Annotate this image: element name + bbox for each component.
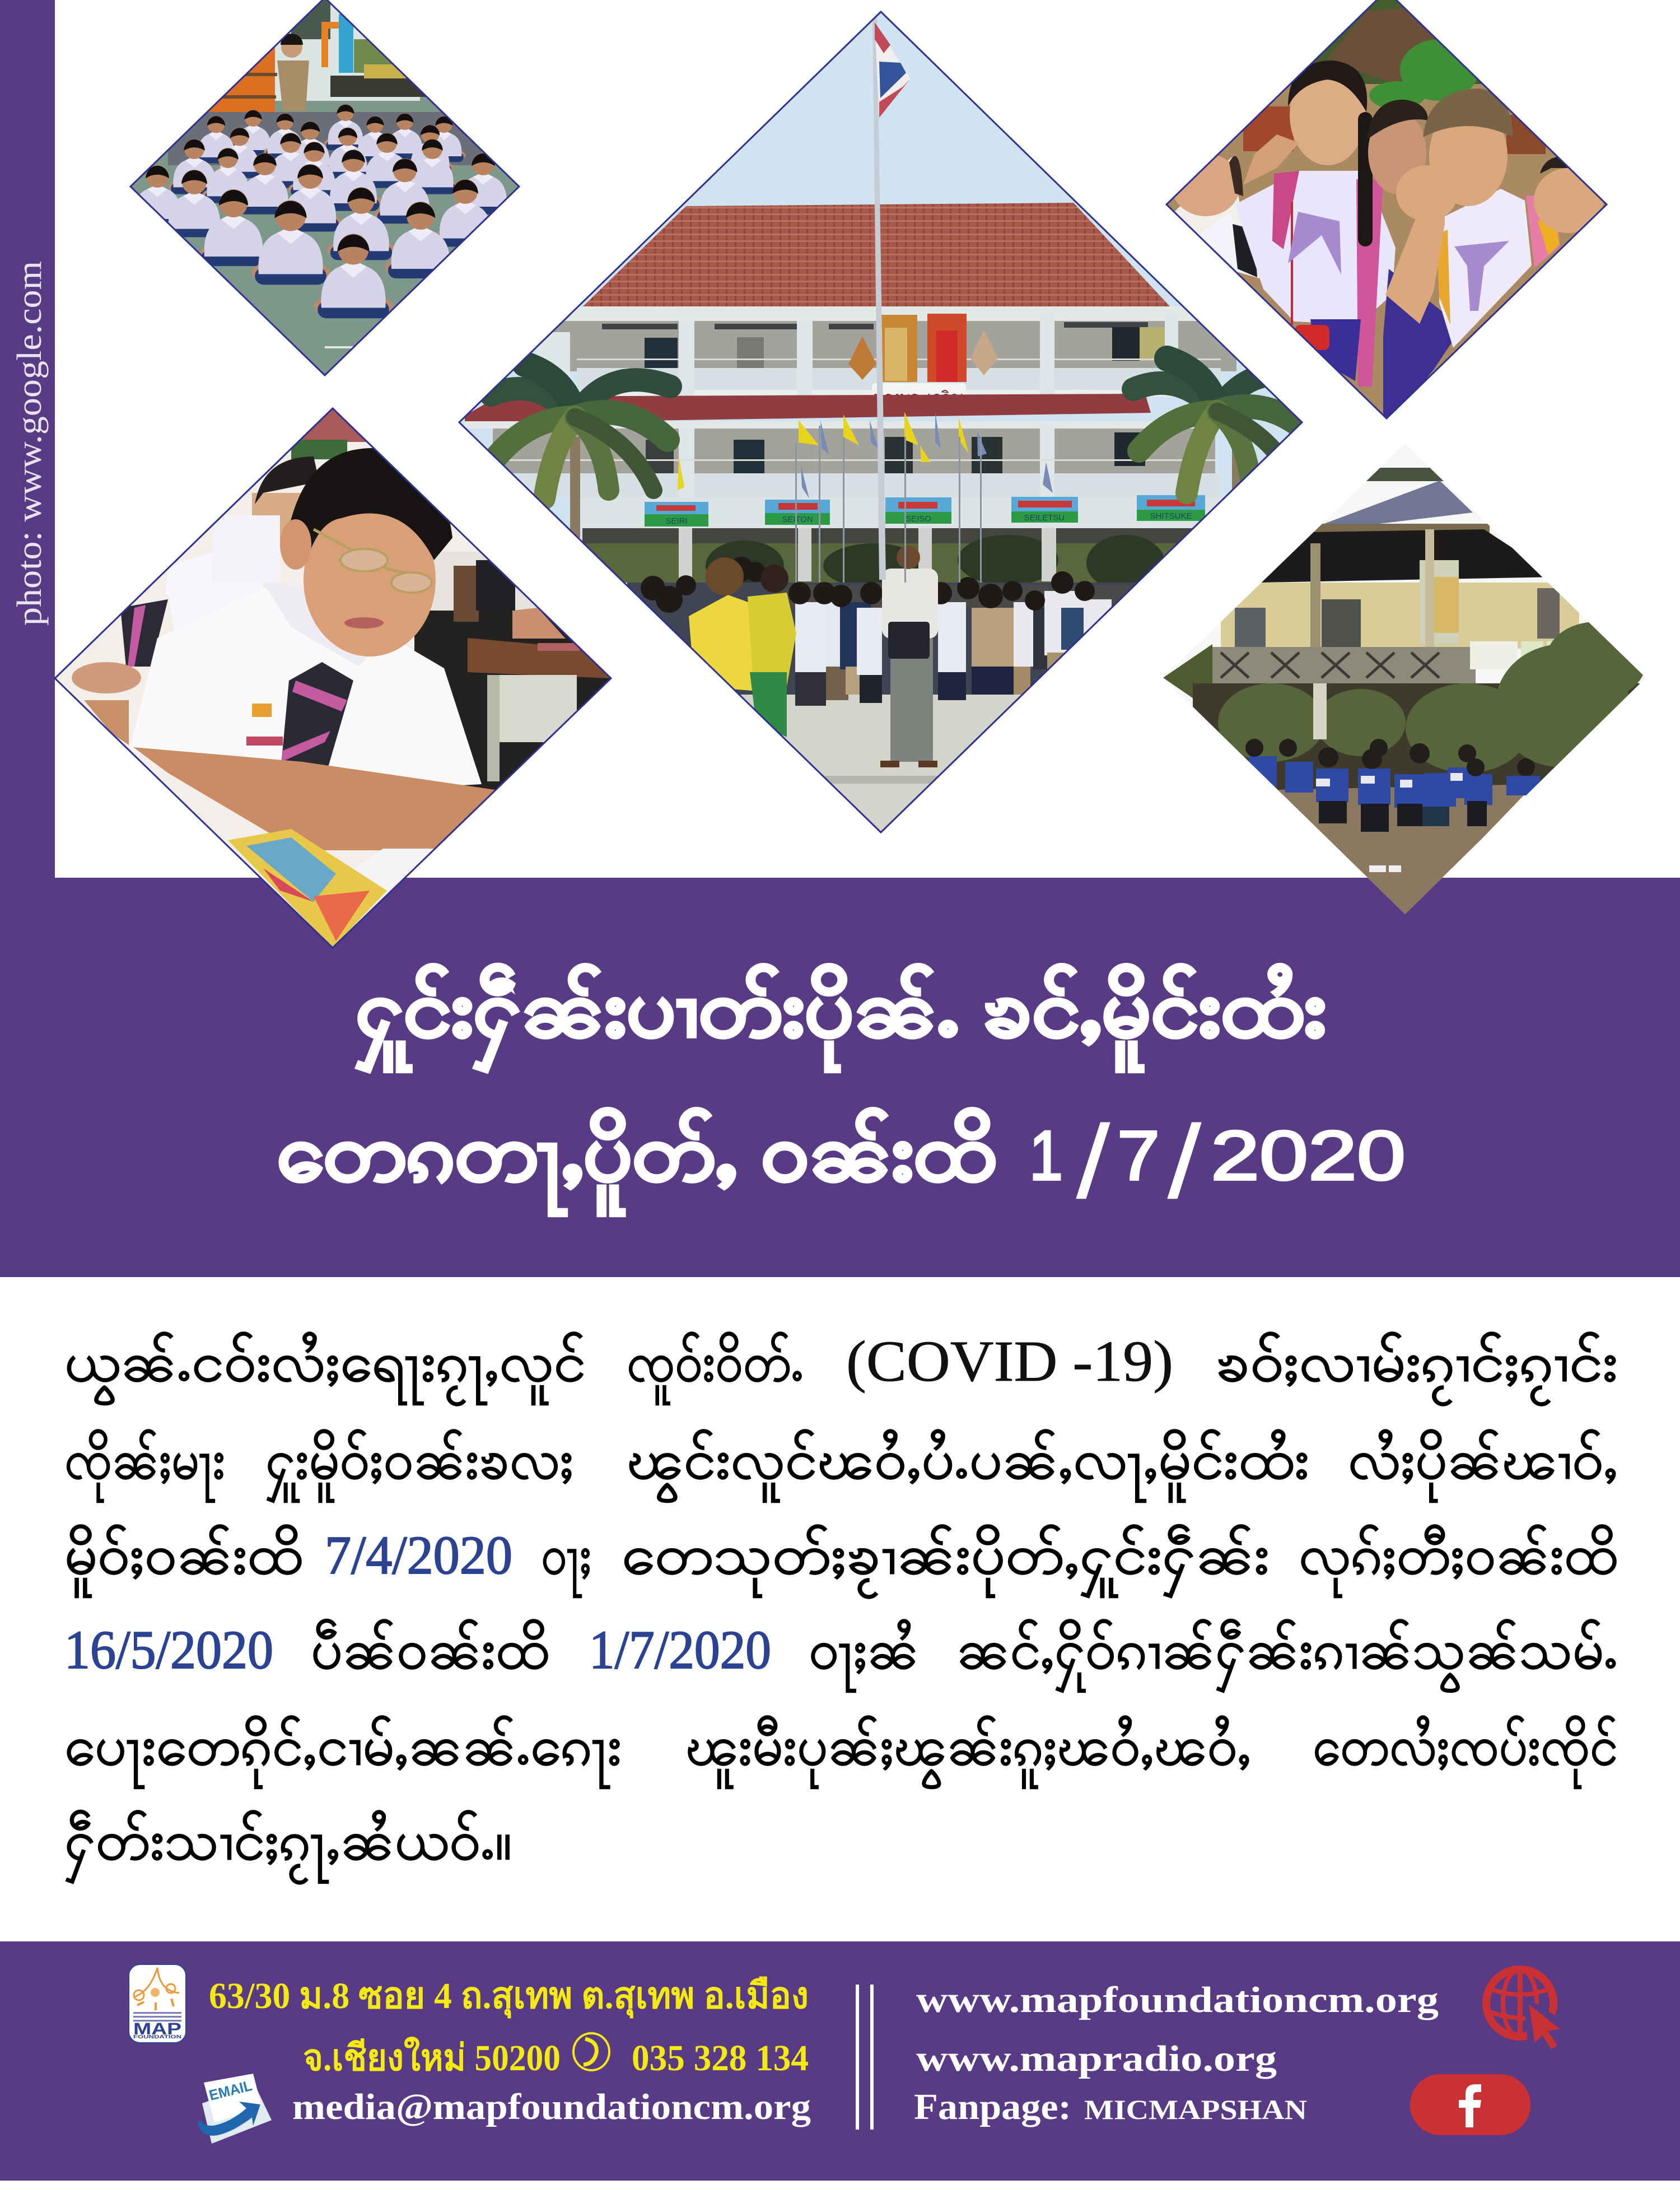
panel: purple title band: [0, 878, 1680, 1277]
panel: purple footer band: [0, 1941, 1680, 2181]
text: photo credit: photo: www.google.com: [11, 261, 49, 626]
title line 2: /: [1168, 1105, 1202, 1220]
body line 6: ႁဵတ်းသၢင်ႈၵႂႃႇၼႆယဝ်ႉ။: [64, 1810, 512, 1884]
icon: MAP Foundation logo: FOUNDATION: [133, 2034, 181, 2039]
icon: email envelope: EMAIL: [207, 2077, 254, 2104]
body line 4: ပဵၼ်ဝၼ်းထိ: [311, 1619, 549, 1680]
photo: boy writing at desk: [50, 403, 616, 952]
body line 1: ယွၼ်ႉငဝ်းလႆႈရေႃးၵႂႃႇလူင်: [64, 1333, 586, 1406]
body line 3: 7/4/2020: [325, 1525, 512, 1586]
photo: school building with morning assembly: [454, 6, 1316, 840]
text: website: www.mapfoundationcm.org: [916, 1980, 1439, 2020]
photo: school building with morning assembly: ทรงพระเจริญ: [874, 389, 963, 407]
panel: purple left bar: [0, 0, 55, 878]
photo: school building with morning assembly: SEIRI: [665, 516, 688, 526]
text: address line 1: 63/30 ม.8 ซอย 4 ถ.สุเทพ ต.สุเทพ อ.เมือง: [209, 1976, 809, 2019]
body line 5: [64, 1716, 1618, 1789]
photo: smiling schoolgirls: [1162, 0, 1610, 420]
body line 2: လႆႈပိုၼ်ၽၢဝ်ႇ: [1348, 1430, 1618, 1502]
body line 4: [64, 1619, 1618, 1693]
icon: MAP Foundation logo: MAP: [133, 2020, 181, 2038]
title line 2: တေၵတႃႇပိူတ်ႇ ဝၼ်းထိ: [277, 1107, 996, 1217]
body line 4: ၼင်ႇႁိုဝ်ၵၢၼ်ႁဵၼ်းၵၢၼ်သွၼ်သမ်ႉ: [956, 1619, 1618, 1693]
text: address line 2 and phone: [303, 2033, 809, 2079]
photo: wooden school building with children: [1159, 440, 1652, 919]
body line 3: လုၵ်ႈတီႈဝၼ်းထိ: [1299, 1525, 1618, 1597]
text: fanpage: [914, 2086, 1307, 2127]
photo: school building with morning assembly: SEISO: [906, 514, 931, 524]
body line 2: ၽွင်းလူင်ၽဝႆႇပႆႉပၼ်ႇလႃႇမိူင်းထႆး: [627, 1430, 1309, 1502]
heading: school reopening title: [277, 963, 1406, 1220]
body line 3: ဝႃႈ: [541, 1525, 591, 1597]
text: address line 2 and phone: จ.เชียงใหม่ 50200: [303, 2036, 561, 2079]
body line 2: [64, 1430, 1618, 1503]
body line 1: ၸူဝ်းဝိတ်ႉ: [627, 1333, 804, 1405]
body line 1: (COVID -19): [846, 1329, 1173, 1394]
body line 4: 1/7/2020: [589, 1620, 771, 1680]
title line 2: 2020: [1211, 1117, 1406, 1195]
photo: students sitting in rows: [123, 0, 526, 381]
text block: body paragraph: [64, 1329, 1618, 1884]
photo: school building with morning assembly: SEITON: [782, 515, 813, 524]
photo: school building with morning assembly: SEILETSU: [1024, 513, 1065, 523]
text: fanpage: MICMAPSHAN: [1084, 2094, 1307, 2125]
text: email address: media@mapfoundationcm.org: [292, 2086, 811, 2127]
body line 5: ၽူးမီးပုၼ်ႈၽွၼ်းၵူႈၽဝႆႇၽဝႆႇ: [685, 1716, 1251, 1789]
title line 2: [277, 1105, 1406, 1220]
title line 1: ႁူင်းႁဵၼ်းပၢတ်းပိုၼ်ႉ ၶင်ႇမိူင်းထႆး: [356, 963, 1326, 1073]
text: address line 2 and phone: 035 328 134: [632, 2038, 809, 2079]
body line 3: [64, 1525, 1618, 1599]
photo: school building with morning assembly: SHITSUKE: [1150, 511, 1192, 521]
icon: facebook button: [1410, 2074, 1530, 2135]
icon: globe with cursor: [1486, 1969, 1560, 2049]
text: radio website: www.mapradio.org: [916, 2038, 1277, 2079]
title line 2: 7: [1117, 1117, 1160, 1195]
body line 2: ၸိုၼ်ႈမႃး: [64, 1430, 225, 1502]
body line 3: တေသုတ်ႈၶႂၢၼ်းပိုတ်ႇႁူင်းႁဵၼ်း: [622, 1525, 1270, 1599]
title line 2: /: [1076, 1105, 1110, 1220]
divider: double vertical line: [856, 1985, 874, 2130]
body line 1: [64, 1329, 1618, 1406]
body line 4: 16/5/2020: [64, 1620, 273, 1680]
body line 3: မိူဝ်ႈဝၼ်းထိ: [64, 1525, 303, 1597]
text: fanpage: Fanpage:: [914, 2086, 1071, 2127]
body line 5: ပေႃးတေၵိုင်ႇငၢမ်ႇၼၼ်ႉၵေႃး: [64, 1716, 622, 1789]
body line 5: တေလႆႈၸပ်းၸိုင်: [1313, 1716, 1618, 1789]
icon: email envelope: [198, 2074, 272, 2144]
body line 2: ႁူးမိူဝ်ႈဝၼ်းၶလႈ: [265, 1430, 573, 1503]
body line 1: ၶဝ်ႈလၢမ်းၵႂၢင်ႈၵႂၢင်း: [1216, 1333, 1618, 1406]
title line 2: 1: [1029, 1117, 1063, 1195]
body line 4: ဝႃႈၼႆ: [809, 1620, 919, 1692]
icon: MAP Foundation logo: [129, 1964, 186, 2043]
